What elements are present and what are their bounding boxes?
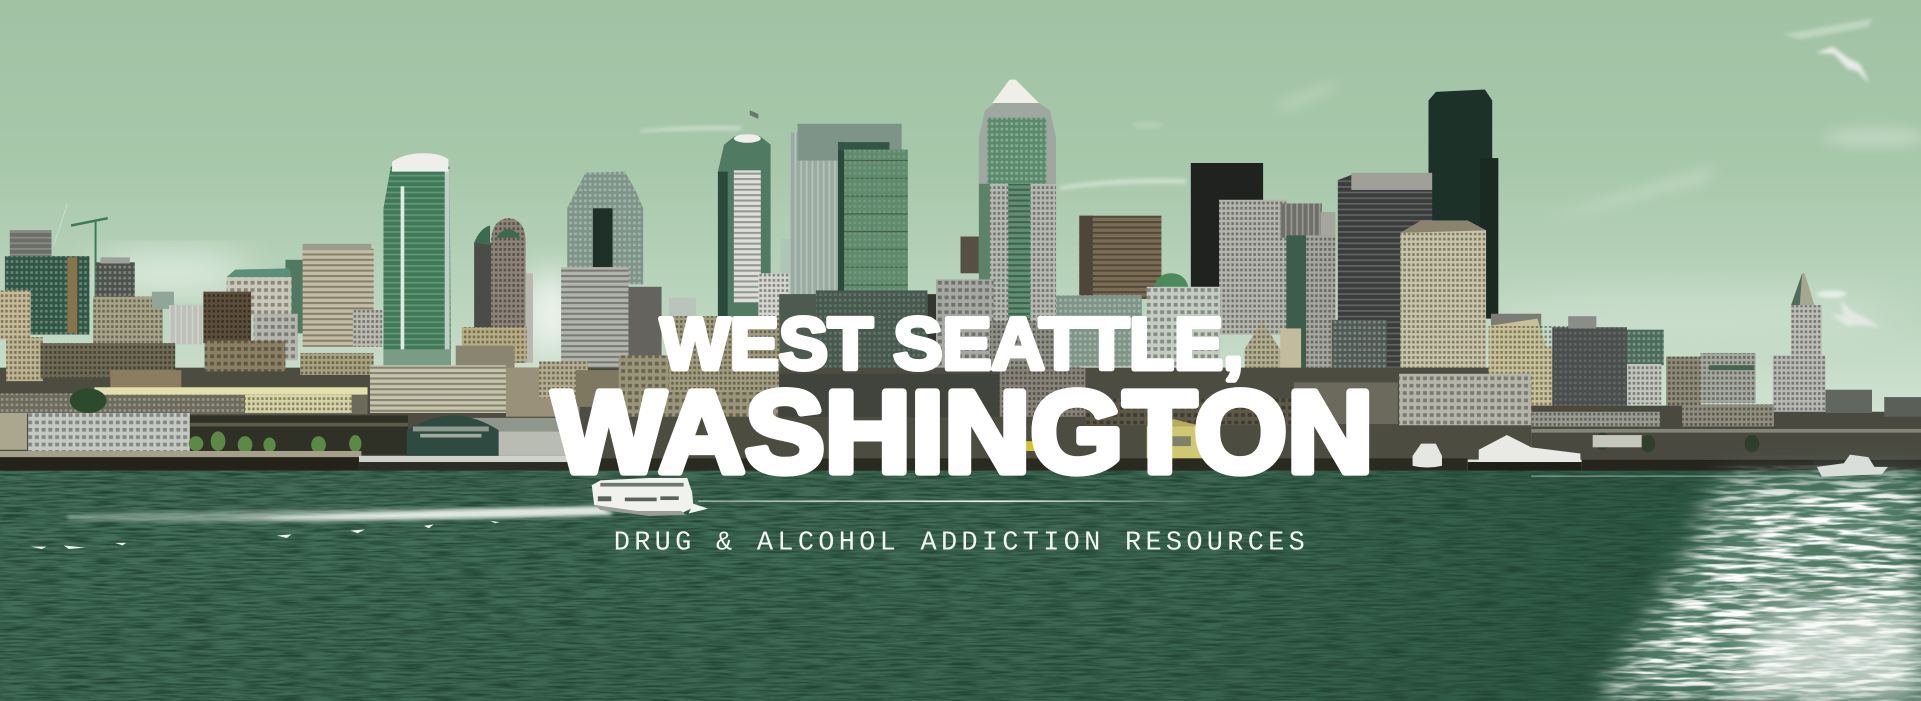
divider line	[698, 500, 1225, 502]
stern wake foam	[1600, 476, 1921, 701]
green residential tower	[383, 153, 451, 366]
striped white-core tower	[718, 134, 790, 322]
seagull: upper	[1816, 47, 1870, 83]
brown striped office tower	[1079, 216, 1161, 299]
heading: Washington: WASHINGTON	[553, 367, 1373, 497]
domed glass building	[1056, 273, 1220, 403]
downtown piers	[0, 457, 1921, 473]
black office tower	[1191, 163, 1263, 304]
seagull: lower	[1830, 300, 1881, 327]
dark glass mid-rise	[779, 279, 1056, 395]
water	[0, 471, 1921, 701]
white pier house	[1479, 435, 1580, 462]
far-right low skyline	[1531, 390, 1921, 460]
hillside tree	[70, 388, 107, 413]
cream waterfront band	[0, 387, 368, 414]
crown-topped central skyscraper	[960, 80, 1056, 337]
tall black-green tower	[1428, 89, 1498, 319]
white waterfront building block	[0, 413, 190, 451]
crane	[54, 203, 108, 300]
low-rise tan mid-ground blocks	[0, 316, 1531, 460]
right-hand beige and dark mid-rises	[1489, 314, 1756, 413]
far-left skyscrapers	[0, 230, 202, 348]
heading: West Seattle: WEST SEATTLE,	[660, 304, 1244, 385]
clouds	[92, 18, 1921, 355]
dark banded tower	[1338, 173, 1432, 401]
mid-left skyscrapers	[203, 244, 382, 360]
distant boat trail	[1531, 476, 1819, 477]
ferry wake	[31, 506, 613, 549]
green-glass stub and beige spire	[1245, 320, 1387, 406]
subtitle: DRUG & ALCOHOL ADDICTION RESOURCES	[614, 529, 1305, 559]
Seattle Aquarium pier building	[359, 415, 573, 462]
grey grid tower	[1219, 200, 1286, 335]
sky background	[0, 0, 1921, 484]
crown-topped green-grey tower and pale block	[561, 172, 696, 370]
far-right ferry	[1817, 455, 1888, 477]
low white building at tower base	[1399, 374, 1531, 425]
flag	[750, 110, 758, 119]
yellow waterfront building	[1005, 419, 1203, 461]
beige grid tower	[1400, 221, 1486, 375]
green glass office tower	[790, 124, 908, 319]
moored white ferry	[1413, 444, 1442, 468]
tower cluster right of grey grid	[1280, 203, 1335, 385]
arched tan tower	[474, 218, 533, 363]
white ferry boat	[592, 478, 708, 516]
elevated road viaduct and trees	[0, 415, 408, 458]
Smith Tower	[1773, 273, 1825, 412]
